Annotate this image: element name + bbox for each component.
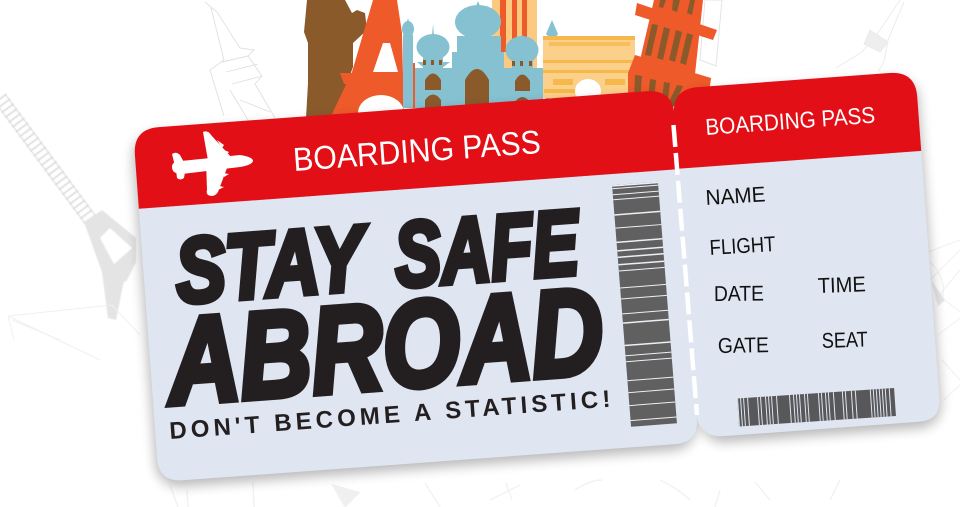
stub barcode <box>738 402 895 412</box>
ticket drop shadows <box>131 77 942 488</box>
stub field: gate: GATE <box>718 333 769 358</box>
icon: airplane <box>172 131 253 196</box>
main red header <box>133 89 678 209</box>
subtitle: DON'T BECOME A STATISTIC! <box>168 386 611 445</box>
stub field: flight: FLIGHT <box>709 232 776 260</box>
title: safe: SAFE <box>391 192 584 307</box>
main ticket panel <box>133 89 698 482</box>
landmark: leaning tower of Pisa <box>628 0 722 110</box>
stub ticket panel <box>672 71 941 438</box>
stub field: seat: SEAT <box>821 327 868 353</box>
title: abroad: ABROAD <box>161 262 608 430</box>
stub red header <box>672 71 921 169</box>
stub field: time: TIME <box>817 272 866 298</box>
landmark: Taj Mahal <box>402 1 543 108</box>
background sketch: tower top right <box>836 0 904 72</box>
landmark: brown statue <box>304 0 367 118</box>
landmark: triumphal arch <box>543 20 635 103</box>
landmark: Eiffel tower <box>330 0 404 131</box>
background sketch: tower top left <box>205 2 275 120</box>
landmarks illustration <box>304 0 722 131</box>
stub field: name: NAME <box>705 182 766 210</box>
background sketch: bottom silhouettes <box>170 480 840 507</box>
stub body <box>678 151 941 438</box>
main body <box>139 169 698 482</box>
stub field: date: DATE <box>714 282 764 306</box>
heading: stub boarding pass: BOARDING PASS <box>704 102 876 140</box>
background sketch: faint lines lower left <box>8 305 140 360</box>
title: stay: STAY <box>172 207 373 323</box>
background sketch: right side building <box>928 240 960 400</box>
background sketch: Eiffel tower lattice <box>0 94 136 320</box>
perforation dashed line <box>674 125 697 415</box>
main barcode <box>635 184 654 425</box>
landmark: striped tower <box>492 0 537 68</box>
heading: main boarding pass: BOARDING PASS <box>292 123 542 178</box>
